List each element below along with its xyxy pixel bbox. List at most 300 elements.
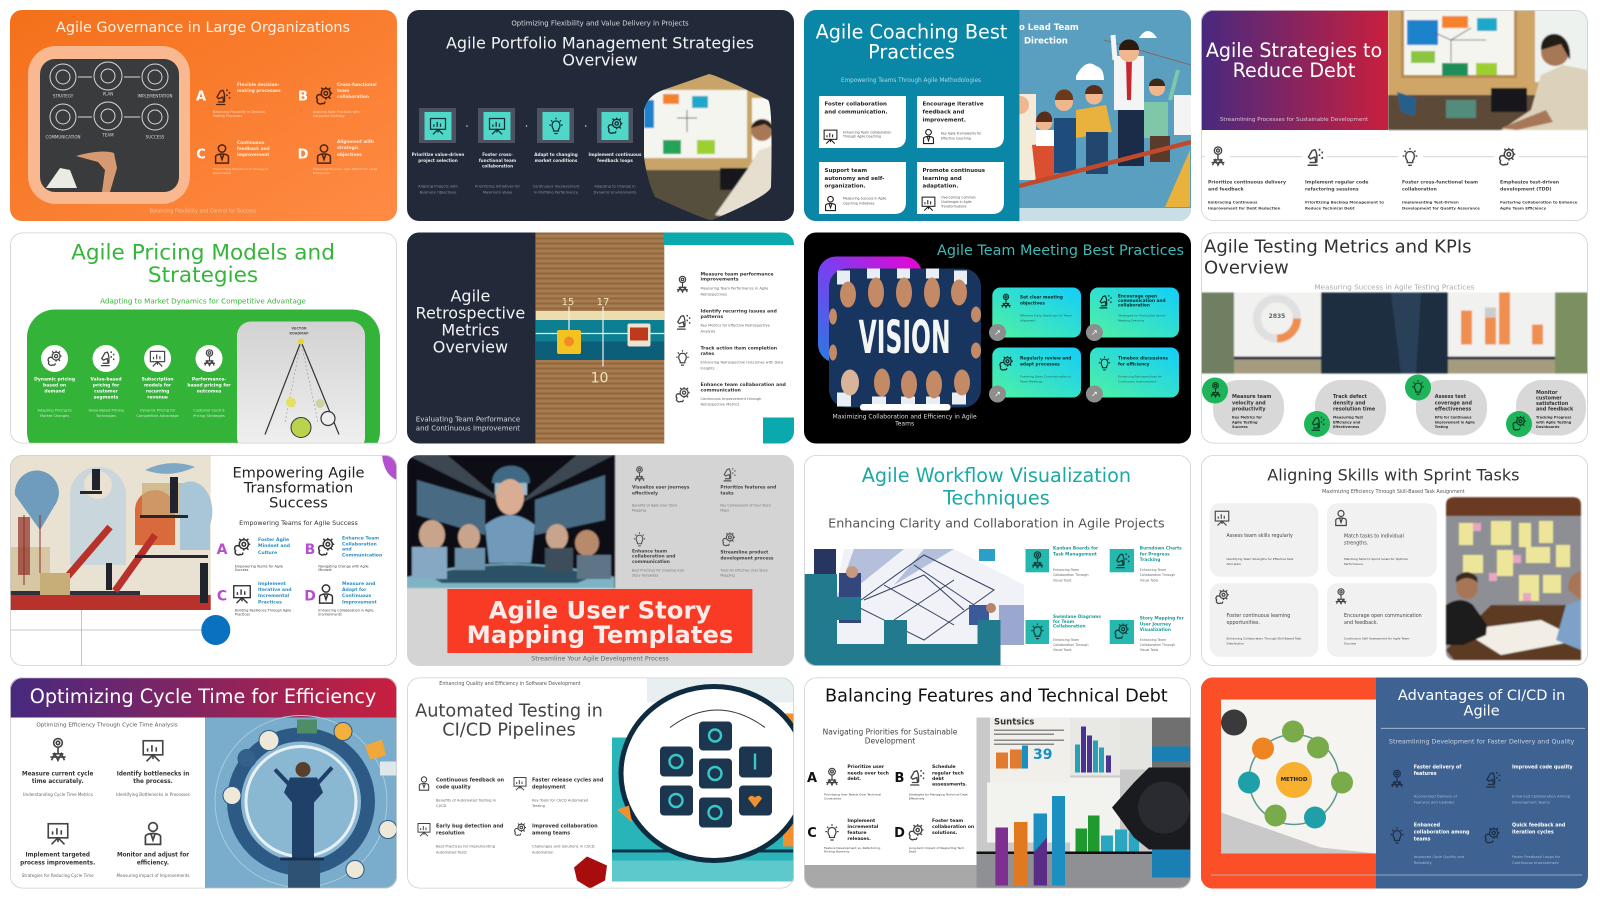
quadrant list: assessments.	[932, 781, 967, 787]
panel: Agile Pricing Models and Strategies	[10, 232, 397, 460]
title banner	[447, 589, 752, 653]
column text: Development for Quality Assurance	[1402, 205, 1480, 210]
quadrant list: Benefits of Agile User Story	[632, 503, 677, 507]
tile: open communication: Continuous Skill Assessment for Agile Team	[1344, 637, 1409, 641]
quadrant list: Foster Agile	[258, 536, 289, 542]
title: Automated Testing in	[415, 702, 603, 722]
title block: Reduce Debt	[1233, 58, 1356, 82]
image: vector roadmap: VECTOR	[291, 326, 307, 330]
quadrant list: Accelerated Delivery of	[1414, 794, 1458, 798]
pill: velocity: Key Metrics for	[1232, 416, 1262, 420]
item A: Flexible decision-	[237, 82, 280, 88]
item D: Enterprises	[313, 171, 330, 175]
quadrant list: Best Practices for Creating User	[632, 568, 685, 572]
image: vision with hands	[818, 256, 981, 410]
column labels: Techniques	[95, 414, 116, 418]
image: wood timeline	[536, 232, 664, 444]
pill: defect density: resolution time	[1333, 406, 1376, 412]
feature text: Tracking	[1140, 556, 1160, 562]
quadrant list: collaboration on	[932, 824, 974, 830]
feature text: Collaboration Through	[1053, 573, 1088, 577]
tile: assess skills: Assess team skills regularly	[1226, 533, 1293, 539]
card: continuous learning: adaptation.	[922, 184, 958, 190]
divider	[1211, 728, 1585, 875]
quadrant list: Practices	[258, 599, 282, 605]
feature text: Burndown Charts	[1140, 545, 1182, 551]
quadrant list: Improvement	[342, 599, 377, 605]
subtitle: Measuring Success in Agile Testing Practices	[1314, 282, 1475, 292]
item A: making processes	[237, 88, 281, 94]
list items: Retrospectives	[700, 292, 727, 296]
photo: sticky-note wall meeting	[1446, 497, 1581, 660]
tile: open communication: and feedback.	[1344, 620, 1378, 626]
image: chalkboard with strategy diagram: TEAM	[101, 132, 114, 138]
item B: Corporate Strategy	[313, 114, 345, 118]
tile: set clear objectives: objectives	[1020, 300, 1045, 306]
column labels: Continuous Improvement	[533, 185, 580, 189]
tile: open communication: ↗	[1091, 328, 1098, 337]
illustration: team on ladder: Direction	[1024, 37, 1068, 47]
image: method diagram on paper	[1221, 700, 1376, 854]
column labels: Dynamic Pricing for	[140, 408, 176, 412]
feature text	[1053, 545, 1185, 652]
feature text: Swimlane Diagrams	[1053, 614, 1101, 620]
quadrant list: Maps	[720, 509, 729, 513]
list items: Continuous feedback on	[436, 778, 505, 784]
title panel: Agile	[450, 286, 490, 305]
quadrant list: Communication	[342, 552, 382, 558]
quadrant list: Iterative and	[258, 586, 292, 592]
list items: deployment	[532, 784, 566, 790]
tile: timebox discussions: Timebox discussions	[1118, 355, 1168, 361]
quadrant list: Empowering Teams for Agile	[235, 564, 283, 568]
kicker: Enhancing Quality and Efficiency in Software Development	[439, 681, 581, 687]
feature text: Collaboration Through	[1053, 643, 1088, 647]
column labels: Prioritize value-driven	[412, 152, 464, 156]
subtitle: Maximizing Efficiency Through Skill-Based Task Assignment	[1322, 489, 1465, 495]
card: team autonomy: Coaching Initiatives	[843, 201, 875, 205]
column labels: Dynamic Environments	[594, 191, 637, 195]
card: foster collaboration	[819, 96, 906, 148]
list items	[676, 271, 786, 406]
illustration: man controlling clock dial	[205, 716, 397, 888]
list items: Key Tools for CI/CD Automated	[532, 798, 588, 802]
pill: velocity: Measure team	[1232, 394, 1271, 400]
feature text: for Progress	[1140, 551, 1170, 557]
feature icons	[1031, 552, 1129, 639]
list items: Early bug detection and	[436, 824, 504, 830]
feature text: Visual Tools	[1140, 648, 1159, 652]
column labels: in Portfolio Performance	[534, 191, 579, 195]
column labels: Competitive Advantage	[136, 414, 180, 418]
subtitle: Enhancing Clarity and Collaboration in Agile Projects	[828, 516, 1165, 532]
column labels: demand	[44, 388, 65, 394]
list items: Measuring Team Performance in Agile	[700, 286, 769, 290]
quadrant list	[217, 535, 382, 616]
subtitle: Adapting to Market Dynamics for Competitive Advantage	[100, 296, 306, 306]
tile: match tasks: strengths.	[1344, 540, 1368, 546]
column labels: Maximum Value	[483, 191, 513, 195]
quadrant list: Constraints	[824, 796, 842, 800]
list items	[418, 777, 604, 854]
pill: defect density: density and	[1333, 400, 1366, 406]
icon tiles row	[419, 108, 633, 143]
illustration: team on ladder	[1011, 23, 1191, 221]
pill: customer satisfaction: customer	[1536, 396, 1562, 402]
quadrant list: Finding Harmony	[824, 850, 850, 854]
card: iterative feedback	[917, 96, 1004, 148]
pill: defect density: Measuring Test	[1333, 416, 1363, 420]
list items: Best Practices for Implementing	[436, 844, 495, 848]
column labels: revenue	[147, 394, 168, 400]
column labels: Market Changes	[40, 414, 69, 418]
list items: patterns	[700, 314, 723, 320]
title: Agile Workflow Visualization	[862, 464, 1131, 486]
item C	[196, 140, 270, 175]
quadrant list: Prioritize features and	[720, 484, 776, 490]
pill: test coverage: Testing	[1435, 425, 1449, 429]
caption: Streamline Your Agile Development Process	[531, 656, 669, 662]
quadrant list: B	[895, 771, 904, 786]
quadrant list: debt	[932, 776, 945, 782]
tile: open communication: Encourage open communication	[1344, 612, 1422, 618]
list items: CI/CD	[436, 804, 446, 808]
quadrant list: Faster delivery of	[1414, 764, 1462, 770]
footer caption: Balancing Flexibility and Control for Success	[150, 208, 257, 214]
pill: customer satisfaction: Tracking Progress	[1536, 416, 1571, 420]
quadrant list: Mapping	[632, 509, 646, 513]
tile: review and adapt	[989, 348, 1081, 402]
tile: continuous learning	[1210, 583, 1318, 657]
quadrant list: Development Teams	[1512, 800, 1550, 804]
feature text: Visual Tools	[1053, 578, 1072, 582]
quadrant list	[632, 467, 776, 578]
quadrant list: D	[894, 826, 905, 841]
quadrant list: Continuous	[342, 592, 372, 598]
tile: timebox discussions	[1086, 348, 1179, 402]
card: continuous learning: Overcoming Common	[941, 196, 976, 200]
column labels	[34, 376, 231, 418]
quadrant list: Improved Code Quality and	[1414, 855, 1464, 859]
panel: Agile User Story Mapping Templates	[407, 455, 794, 666]
quadrant list: Visualize user journeys	[632, 484, 690, 490]
tile: continuous learning: opportunities.	[1226, 620, 1260, 626]
quadrant items: Identifying Bottlenecks in Processes	[116, 792, 190, 796]
tile: match tasks: Matching Skills to Sprint Goals for Optimal	[1344, 557, 1408, 561]
tile: set clear objectives	[989, 288, 1081, 341]
quadrant list: Mapping	[720, 574, 735, 578]
image: chalkboard with strategy diagram: COMMUNICATION	[46, 134, 80, 140]
column labels: Prioritizing Initiatives for	[475, 185, 521, 189]
image: method diagram on paper: METHOD	[1281, 777, 1308, 783]
pill: customer satisfaction	[1506, 380, 1586, 437]
column text	[1208, 179, 1578, 210]
grey footer band	[804, 865, 976, 888]
column text: Fostering Collaboration to Enhance	[1500, 199, 1578, 204]
tile: assess skills: Allocation	[1226, 562, 1241, 566]
tile: continuous learning: Foster continuous learning	[1226, 612, 1290, 618]
quadrant list: Faster Feedback Loops for	[1512, 855, 1561, 859]
pill: customer satisfaction: with Agile Testing	[1536, 420, 1572, 424]
feature text: Enhancing Team	[1053, 638, 1079, 642]
quadrant list: Enhance team	[632, 548, 667, 554]
subtitle: Development	[865, 736, 915, 745]
title block: Streamlining Processes for Sustainable Development	[1220, 117, 1369, 123]
tile: open communication: collaboration	[1118, 302, 1150, 308]
item A: Making Processes	[213, 114, 242, 118]
quadrant items: Strategies for Reducing Cycle Time	[22, 872, 94, 878]
item C: Continuous	[237, 140, 265, 146]
panel: Empowering Agile Transformation Success	[10, 455, 397, 666]
panel: Advantages of CI/CD in Agile	[1201, 678, 1588, 888]
list items: among teams	[532, 830, 570, 836]
feature text: for Team	[1053, 618, 1075, 624]
feature text: Kanban Boards for	[1053, 545, 1099, 551]
column text: Reduce Technical Debt	[1305, 205, 1355, 210]
list items: communication	[700, 387, 741, 393]
quadrant list: debt.	[847, 776, 861, 782]
column text: Prioritize continuous delivery	[1208, 179, 1286, 185]
quadrant list: C	[217, 589, 227, 605]
column labels: based pricing for	[187, 382, 231, 388]
panel: Agile Retrospective Metrics Overview	[407, 232, 794, 444]
quadrant list: Enhance Team	[342, 535, 379, 541]
tile: open communication	[1327, 583, 1437, 657]
quadrant list: B	[305, 542, 315, 558]
tile: match tasks: Performance	[1344, 562, 1363, 566]
column text: Implement regular code	[1305, 179, 1368, 185]
quadrant list: effectively	[632, 490, 658, 496]
tile: match tasks: Match tasks to individual	[1344, 533, 1404, 539]
feature text: Visual Tools	[1053, 648, 1072, 652]
card: iterative feedback: Effective Coaching	[941, 137, 971, 141]
icon circles	[41, 345, 222, 372]
item C: C	[196, 148, 206, 162]
title panel: Evaluating Team Performance	[416, 416, 520, 424]
image: futuristic team table	[407, 455, 615, 588]
tile: open communication: Strategies for Productive Sprint	[1118, 314, 1166, 318]
card: iterative feedback: Key Agile Frameworks for	[941, 131, 982, 135]
item D: objectives	[337, 152, 362, 158]
quadrant list: tasks	[720, 490, 734, 496]
feature text: Task Management	[1053, 551, 1097, 557]
quadrant list: Strategies for Managing Technical Debt	[909, 792, 969, 796]
quadrant items: Monitor and adjust for	[117, 852, 189, 858]
left panel	[804, 10, 1019, 221]
pill: test coverage: effectiveness	[1435, 406, 1471, 412]
image: chalkboard with strategy diagram: IMPLEMENTATION	[137, 94, 173, 98]
tile: set clear objectives: ↗	[994, 328, 1001, 337]
card: iterative feedback: feedback and	[922, 110, 964, 116]
quadrant list: C	[807, 826, 817, 841]
quadrant list: collaboration and	[632, 553, 675, 559]
quadrant list: Foster team	[932, 818, 963, 824]
quadrant items: process improvements.	[20, 860, 95, 866]
quadrant list: Mindset and	[258, 542, 290, 548]
title: Agile	[1464, 704, 1500, 720]
item B: B	[298, 90, 308, 104]
title banner: Agile User Story	[489, 595, 711, 624]
title: CI/CD Pipelines	[442, 720, 576, 740]
quadrant list: Key Components of User Story	[720, 503, 771, 507]
column labels: Adapting to Change in	[594, 185, 636, 189]
column text: and feedback	[1208, 186, 1245, 192]
quadrant list: communication	[632, 558, 670, 564]
list items: Benefits of Automated Testing in	[436, 798, 497, 802]
tile: timebox discussions: Continuous Improvement	[1118, 380, 1157, 384]
title: Practices	[868, 40, 955, 63]
feature text: Enhancing Team	[1053, 568, 1079, 572]
title: Overview	[1204, 257, 1289, 278]
list items: Key Metrics for Effective Retrospective	[700, 324, 771, 328]
column labels: project selection	[418, 158, 458, 162]
feature text: Visualization	[1140, 626, 1171, 632]
title banner: Mapping Templates	[467, 620, 733, 648]
quadrant list: Prioritizing User Needs Over Technical	[824, 792, 881, 796]
list items: Enhance team collaboration and	[700, 382, 786, 388]
panel: Aligning Skills with Sprint Tasks	[1201, 455, 1588, 666]
quadrant list: teams	[1414, 836, 1431, 842]
illustration: charts and camera: 39	[1033, 747, 1052, 763]
tile: timebox discussions: for efficiency	[1118, 361, 1150, 367]
panel: Agile Portfolio Management Strategies Overview	[407, 10, 794, 225]
image: vector roadmap: ROADMAP	[289, 332, 309, 336]
title: Aligning Skills with Sprint Tasks	[1267, 466, 1520, 484]
column labels: feedback loops	[597, 158, 633, 162]
image: chalkboard with strategy diagram: SUCCESS	[146, 134, 165, 140]
image: vector roadmap	[237, 322, 365, 452]
title: Agile Team Meeting Best Practices	[937, 243, 1184, 259]
illustration: figures on abstract stairs	[10, 455, 212, 610]
list items: Improved collaboration	[532, 824, 598, 830]
panel: Balancing Features and Technical Debt	[804, 678, 1191, 888]
panel: Optimizing Cycle Time for Efficiency	[10, 678, 397, 888]
title block	[1201, 10, 1388, 130]
green panel	[27, 310, 380, 443]
title: Techniques	[942, 486, 1050, 509]
card: continuous learning: Promote continuous	[922, 168, 986, 174]
column labels: customer	[94, 388, 119, 394]
photo: man at planning board	[1388, 10, 1588, 130]
photo: dashboard and presenter	[1201, 292, 1588, 374]
item A: Balancing Flexibility in Decision	[213, 110, 265, 114]
tile: continuous learning: Distribution	[1226, 641, 1244, 645]
subtitle: Navigating Priorities for Sustainable	[823, 727, 958, 736]
quadrant list: Practices	[235, 612, 250, 616]
illustration: isometric workflow	[804, 549, 1024, 666]
title: Strategies	[148, 262, 258, 288]
quadrant list: Building Resilience Through Agile	[235, 609, 291, 613]
title: Empowering Agile	[232, 464, 365, 481]
pill: customer satisfaction: and feedback	[1536, 406, 1574, 412]
item B	[298, 82, 377, 118]
list items: Insights	[700, 366, 715, 370]
item B: team	[337, 88, 350, 94]
column labels: Pricing Strategies	[193, 414, 225, 418]
card: continuous learning: Transformations	[940, 205, 967, 209]
quadrant list: feature	[847, 830, 866, 836]
column labels: segments	[94, 394, 119, 400]
quadrant list: Collaboration	[342, 541, 377, 547]
quadrant list: features	[1414, 770, 1437, 776]
item C: Overcoming Resistance to Change in	[213, 167, 269, 171]
subtitle: Streamlining Development for Faster Delivery and Quality	[1389, 738, 1575, 746]
list items: improvements	[700, 276, 739, 282]
quadrant list: iteration cycles	[1512, 829, 1554, 835]
item A	[196, 82, 281, 118]
column text: collaboration	[1402, 186, 1437, 192]
column labels: models for	[144, 382, 172, 388]
column labels: Value-based	[90, 376, 122, 382]
illustration: team on ladder: o Lead Team	[1019, 23, 1079, 33]
subtitle: Empowering Teams for Agile Success	[239, 519, 358, 527]
list items: rates	[700, 350, 714, 356]
list items: Identify recurring issues and	[700, 308, 777, 314]
panel: Automated Testing in CI/CD Pipelines	[407, 678, 807, 888]
column labels: Foster cross-	[482, 152, 513, 156]
column labels: Value-Based Pricing	[88, 408, 124, 412]
orange side panel	[1201, 678, 1376, 888]
quadrant list: Long-term Impact of Neglecting Tech	[909, 846, 964, 850]
pill: customer satisfaction: Monitor	[1536, 390, 1558, 396]
card: team autonomy	[819, 162, 906, 214]
feature text: Enhancing Team	[1140, 568, 1166, 572]
quadrant list: Quick feedback and	[1512, 822, 1566, 828]
image: wood timeline: 10	[591, 370, 608, 386]
title: Agile Portfolio Management Strategies	[446, 33, 754, 52]
caption: Teams	[894, 420, 914, 427]
column labels: Customer-Centric	[193, 408, 225, 412]
list items: code quality	[436, 784, 471, 790]
pill: test coverage: coverage and	[1435, 400, 1472, 406]
title panel: and Continuous Improvement	[416, 424, 520, 432]
image: wood timeline: 15	[562, 297, 574, 308]
column labels: Adapting Pricing to	[38, 408, 72, 412]
quadrant items: efficiency.	[137, 860, 169, 866]
quadrant list: Streamline product	[720, 549, 768, 555]
tile: assess skills	[1210, 503, 1318, 577]
column labels: Aligning Projects with	[418, 185, 458, 189]
header	[10, 678, 397, 718]
list items: Measure team performance	[700, 271, 774, 277]
tile: open communication: communication and	[1118, 298, 1166, 304]
quadrant list: Adapt for	[342, 586, 367, 592]
title: Overview	[562, 50, 638, 69]
tile: timebox discussions: ↗	[1091, 390, 1098, 398]
item B: collaboration	[337, 94, 369, 100]
column labels: Performance-	[192, 376, 226, 382]
column text: Foster cross-functional team	[1402, 179, 1478, 185]
quadrant list: Mindset	[318, 568, 332, 572]
panel: Agile Governance in Large Organizations	[10, 10, 397, 221]
quadrant list: Story Templates	[632, 574, 659, 578]
list items: Analysis	[700, 330, 715, 334]
header: Optimizing Cycle Time for Efficiency	[30, 685, 376, 708]
quadrant list: regular tech	[932, 770, 964, 776]
quadrant list: Measure and	[342, 580, 375, 586]
tile: set clear objectives: Alignment	[1020, 318, 1036, 322]
tile: review and adapt: adapt processes	[1020, 361, 1060, 367]
title: Advantages of CI/CD in	[1398, 688, 1565, 704]
kicker: Optimizing Flexibility and Value Delivery in Projects	[511, 20, 689, 28]
tile: timebox discussions: Enhancing Retrospectives for	[1118, 374, 1163, 378]
quadrant list: Culture	[258, 550, 277, 556]
tile: review and adapt: Fostering Open Communication in	[1020, 374, 1071, 378]
title: Balancing Features and Technical Debt	[825, 686, 1168, 706]
card: iterative feedback: improvement.	[922, 117, 966, 123]
tile: assess skills: Identifying Team Strengths for Effective Task	[1226, 557, 1294, 561]
quadrant list: Implement	[847, 818, 876, 824]
